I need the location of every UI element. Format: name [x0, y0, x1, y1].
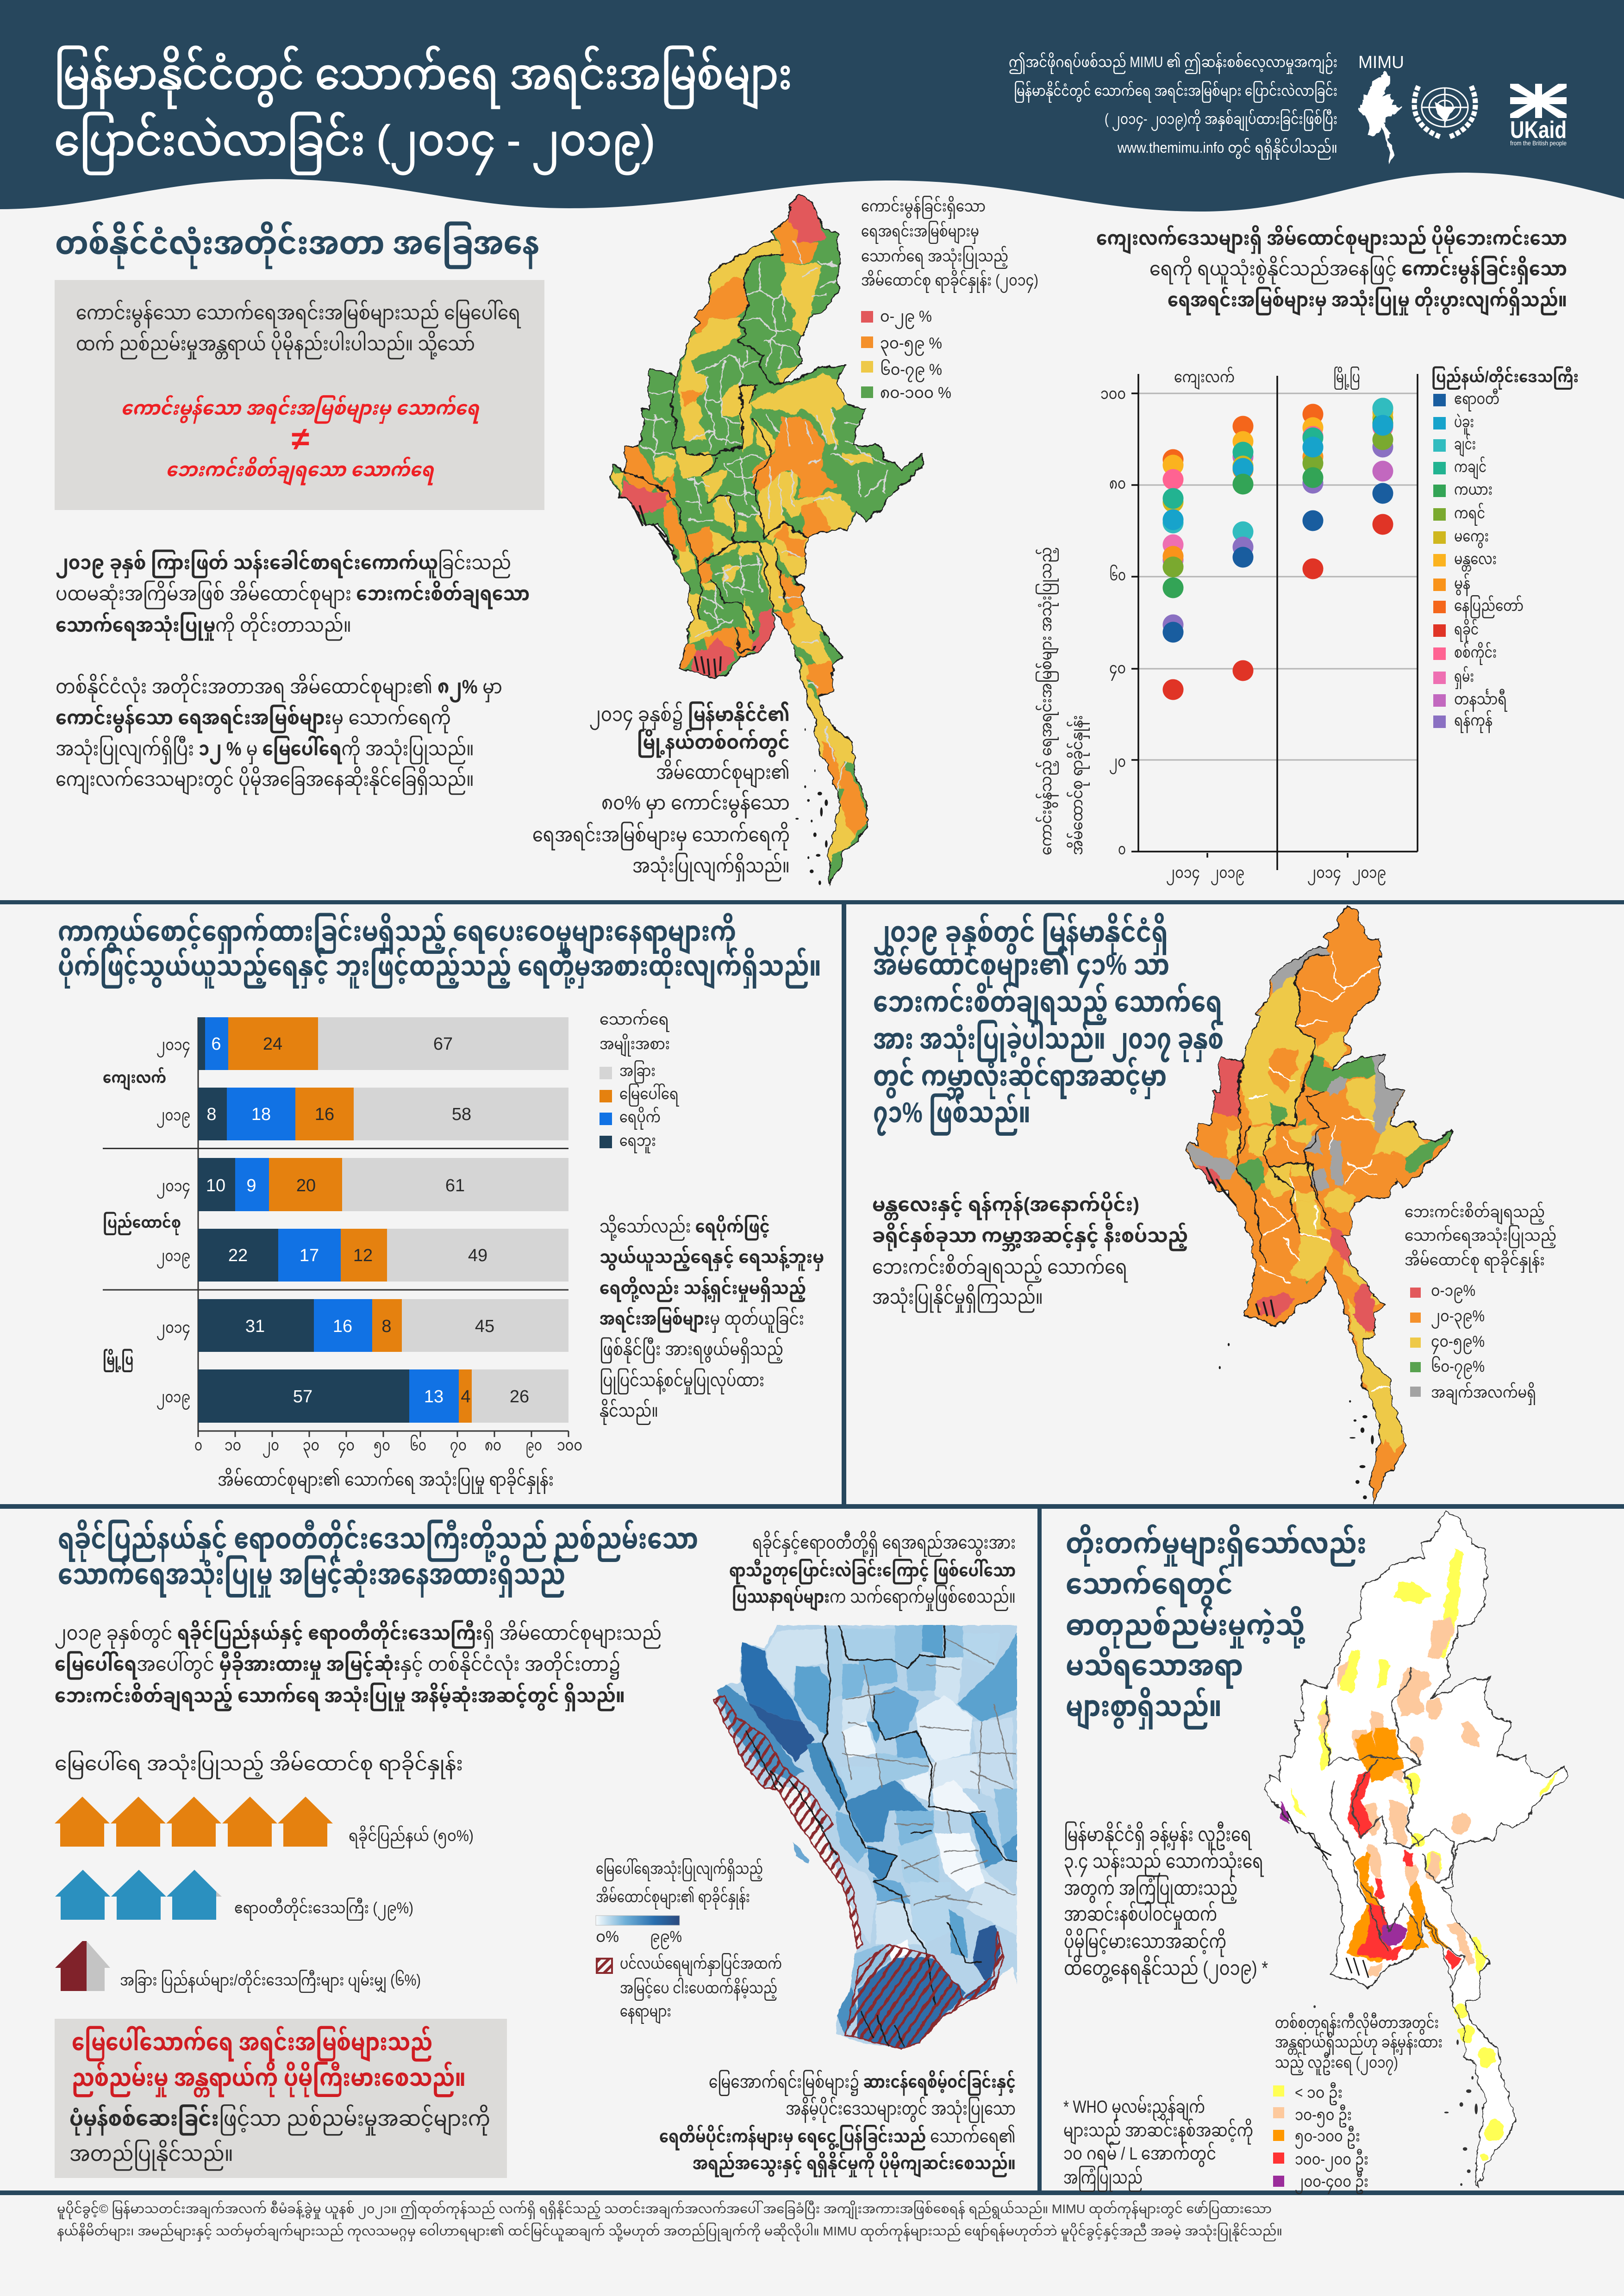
facet labels: ကျေးလက်: [1174, 366, 1235, 390]
text block: arsenic exposure: ၃.၄ သန်းသည် သောက်သုံးရေ: [1064, 1848, 1264, 1877]
legend: safely managed map: သောက်ရေအသုံးပြုသည့်: [1405, 1224, 1556, 1248]
panel: national overview: [55, 194, 1038, 885]
text block: arsenic exposure: [1064, 1822, 1268, 1984]
dots: rural 2014: [1163, 449, 1183, 700]
icon: UN emblem: [1414, 86, 1475, 137]
text block: climate: ပြဿနာရပ်များက သက်ရောက်မှုဖြစ်စေသည်။: [732, 1585, 1016, 1611]
label: Ayeyarwady share: ဧရာဝတီတိုင်းဒေသကြီး (၂၉%): [234, 1897, 413, 1921]
panel: rural urban scatter: [1035, 225, 1579, 885]
legend: map 2014: ရေအရင်းအမြစ်များမှ: [861, 220, 979, 244]
icon: UK aid logo: UKaid: [1510, 117, 1567, 143]
legend: water type: အခြား: [619, 1060, 656, 1083]
legend: safely managed map: ၀-၁၉%: [1431, 1282, 1475, 1303]
text block: salinity: မြေအောက်ရင်းမြစ်များ၌ ဆားငန်ရေစိမ့်ဝင်ခြင်းနှင့်: [709, 2070, 1016, 2096]
text block: piped and bottled: [600, 1214, 824, 1425]
bar: rural 2019: 8: [206, 1105, 217, 1124]
year labels: ၂၀၁၉: [156, 1388, 190, 1410]
x axis labels: [194, 1434, 582, 1458]
icon: UK aid logo: from the British people: [1510, 139, 1567, 147]
x axis labels: ၆၀: [410, 1434, 426, 1454]
text block: Mandalay and Yangon: [872, 1192, 1188, 1313]
x axis labels: ၂၀၁၉: [1211, 864, 1244, 885]
heading: safely managed: အိမ်ထောင်စုများ၏ ၄၁% သာ: [873, 945, 1169, 989]
legend: safely managed map: ၆၀-၇၉%: [1431, 1356, 1485, 1379]
header note: မြန်မာနိုင်ငံတွင် သောက်ရေ အရင်းအမြစ်များ ပြောင်းလဲလာခြင်း: [1014, 80, 1337, 103]
y axis labels: ၁၀၀: [1100, 385, 1126, 403]
legend: surface water map: ၀%: [596, 1928, 619, 1946]
footer disclaimer: နယ်နိမိတ်များ၊ အမည်များနှင့် သတ်မှတ်ချက်များသည် ကုလသမဂ္ဂမှ ဝေါဟာရများ၏ ထင်မြင်ယူဆချက် သို့မဟုတ် အတည်ပြုချက်ကို မဆိုလိုပါ။ MIMU ထုတ်ကုန်များသည် ဖျော်ရန်မဟုတ်ဘဲ မူပိုင်ခွင့်နှင့်အညီ အခမဲ့ အသုံးပြုနိုင်သည်။: [57, 2222, 1282, 2242]
legend: surface water map: ပင်လယ်ရေမျက်နှာပြင်အထက်: [620, 1952, 782, 1977]
bar: urban 2019: [198, 1369, 568, 1423]
text block: rural safer water: ရေအရင်းအမြစ်များမှ အသုံးပြုမှု တိုးပွားလျက်ရှိသည်။: [1168, 287, 1567, 316]
text block: urban 2014: ၈၀% မှာ ကောင်းမွန်သော: [601, 790, 790, 819]
text block: Mandalay and Yangon: မန္တလေးနှင့် ရန်ကုန်(အနောက်ပိုင်း): [872, 1192, 1139, 1220]
text block: rural safer water: ရေကို ရယူသုံးစွဲနိုင်သည်အနေဖြင့် ကောင်းမွန်ခြင်းရှိသော: [1149, 256, 1567, 285]
callout: improved is not safe: ≠: [291, 421, 309, 457]
legend: map 2014: ၀-၂၉ %: [880, 308, 932, 329]
legend: states and regions: မန္တလေး: [1454, 550, 1497, 572]
legend: states and regions: ပဲခူး: [1454, 413, 1474, 435]
map: improved water sources 2014: [610, 194, 924, 885]
legend: arsenic map: < ၁၀ ဦး: [1295, 2082, 1343, 2105]
map: surface water use: [713, 1625, 1017, 2049]
legend: surface water map: ၉၉%: [650, 1928, 682, 1949]
heading: safely managed: ၇၁% ဖြစ်သည်။: [873, 1093, 1031, 1136]
legend: surface water map: နေရာများ: [620, 2003, 671, 2024]
legend: water type: ရေပိုက်: [619, 1106, 661, 1130]
category labels: မြို့ပြ: [103, 1349, 133, 1372]
bar: rural 2014: [198, 1017, 568, 1070]
bar: urban 2019: 26: [510, 1387, 529, 1406]
bar: rural 2019: 58: [452, 1105, 471, 1124]
text block: dependence on surface water: ၂၀၁၉ ခုနှစ်တွင် ရခိုင်ပြည်နယ်နှင့် ဧရာဝတီတိုင်းဒေသကြီးရှိ အိမ်ထောင်စုများသည်: [55, 1620, 662, 1649]
bar: union 2014: 61: [445, 1176, 465, 1195]
icon: UK aid logo: [1510, 84, 1567, 147]
bar: urban 2019: 4: [461, 1387, 471, 1406]
text block: salinity: အနိမ့်ပိုင်းဒေသများတွင် အသုံးပြုသော: [786, 2097, 1016, 2123]
text block: urban 2014: အသုံးပြုလျက်ရှိသည်။: [632, 853, 790, 882]
x axis labels: ၂၀: [262, 1437, 279, 1458]
x axis labels: ၂၀၁၉: [1352, 864, 1386, 885]
text block: salinity: အရည်အသွေးနှင့် ရရှိနိုင်မှုကို ပိုမိုကျဆင်းစေသည်။: [693, 2151, 1016, 2178]
legend: safely managed map: [1405, 1201, 1556, 1406]
heading: Rakhine and Ayeyarwady: ရခိုင်ပြည်နယ်နှင့် ဧရာဝတီတိုင်းဒေသကြီးတို့သည် ညစ်ညမ်းသော: [58, 1519, 698, 1562]
legend: states and regions: စစ်ကိုင်း: [1454, 641, 1497, 665]
legend: states and regions: မကွေး: [1454, 528, 1489, 548]
legend: safely managed map: ဘေးကင်းစိတ်ချရသည့်: [1405, 1201, 1545, 1225]
legend: arsenic map: ၁၀၀-၂၀၀ ဦး: [1295, 2148, 1368, 2172]
legend: map 2014: ကောင်းမွန်ခြင်းရှိသော: [861, 195, 986, 219]
category labels: ပြည်ထောင်စု: [103, 1212, 181, 1235]
section dividers: [0, 900, 1624, 2195]
label: Rakhine share: ရခိုင်ပြည်နယ် (၅၀%): [349, 1824, 474, 1848]
x axis labels: ၂၀၁၄: [1307, 864, 1341, 885]
y axis labels: ၂၀: [1109, 753, 1126, 774]
pictogram heading: မြေပေါ်ရေ အသုံးပြုသည့် အိမ်ထောင်စု ရာခိုင်နှုန်း: [55, 1751, 463, 1780]
heading: chemical contamination: သောက်ရေတွင်: [1066, 1564, 1233, 1607]
panel: surface water Rakhine Ayeyarwady: [55, 1519, 1017, 2178]
callout: surface water risk: ပုံမှန်စစ်ဆေးခြင်းဖြင့်သာ ညစ်ညမ်းမှုအဆင့်များကို: [69, 2103, 490, 2136]
year labels: ၂၀၁၉: [156, 1247, 190, 1269]
header note: [1009, 51, 1337, 160]
bar: rural 2014: 6: [211, 1034, 221, 1054]
text block: arsenic exposure: ပိုမိုမြင့်မားသောအဆင့်ကို: [1064, 1929, 1226, 1957]
x axis labels: ၈၀: [485, 1437, 501, 1454]
axes: [103, 1017, 568, 1437]
legend: states and regions: တနင်္သာရီ: [1454, 688, 1507, 712]
callout: surface water risk: [55, 2019, 507, 2178]
category labels: ကျေးလက်: [103, 1067, 166, 1091]
text block: urban 2014: မြို့နယ်တစ်ဝက်တွင်: [637, 729, 790, 758]
legend: states and regions: ရှမ်း: [1454, 665, 1474, 689]
legend: arsenic map: သည့် လူဦးရေ (၂၀၁၇): [1275, 2051, 1398, 2075]
text block: 2019 census: [56, 550, 530, 641]
legend: map 2014: သောက်ရေ အသုံးပြုသည့်: [861, 245, 1008, 269]
bar: union 2019: 17: [300, 1246, 319, 1265]
heading: Rakhine and Ayeyarwady: [58, 1519, 698, 1598]
legend: arsenic map: ၅၀-၁၀၀ ဦး: [1295, 2125, 1360, 2149]
text block: arsenic exposure: အတွက် အကြံပြုထားသည့်: [1064, 1875, 1237, 1904]
label: other regions share: အခြား ပြည်နယ်များ/တိုင်းဒေသကြီးများ ပျမ်းမျှ (၆%): [120, 1969, 421, 1993]
bar: rural 2019: 16: [315, 1105, 334, 1124]
text block: piped and bottled: ဖြစ်နိုင်ပြီး အားရဖွယ်မရှိသည့်: [600, 1337, 783, 1363]
callout: surface water risk: အတည်ပြုနိုင်သည်။: [69, 2139, 233, 2171]
footnote: WHO guideline: [1063, 2095, 1253, 2192]
text block: urban 2014: အိမ်ထောင်စုများ၏: [656, 759, 790, 788]
x axis labels: ၄၀: [338, 1437, 355, 1458]
heading: safely managed: အား အသုံးပြုခဲ့ပါသည်။ ၂၀၁၇ ခုနှစ်: [873, 1019, 1224, 1063]
legend: states and regions: [1431, 366, 1579, 733]
x axis labels: ၁၀: [225, 1437, 241, 1454]
legend: states and regions: ပြည်နယ်/တိုင်းဒေသကြီး: [1431, 366, 1579, 390]
text block: climate: ရာသီဥတုပြောင်းလဲခြင်းကြောင့် ဖြစ်ပေါ်သော: [729, 1558, 1016, 1585]
bar: union 2019: 22: [228, 1246, 248, 1265]
bar: urban 2014: 31: [245, 1317, 265, 1336]
dots: urban 2019: [1372, 398, 1393, 535]
legend: water type: အမျိုးအစား: [600, 1033, 670, 1057]
bar chart: [103, 1017, 582, 1494]
legend: surface water map: [596, 1857, 782, 2024]
text block: dependence on surface water: ဘေးကင်းစိတ်ချရသည့် သောက်ရေ အသုံးပြုမှု အနိမ့်ဆုံးအဆင့်တွင် ရှိသည်။: [55, 1683, 625, 1711]
text block: climate: [729, 1531, 1016, 1611]
legend: safely managed map: အချက်အလက်မရှိ: [1431, 1381, 1536, 1406]
icons: Rakhine houses: [55, 1797, 333, 1847]
callout: improved is not safe: ကောင်းမွန်သော အရင်းအမြစ်များမှ သောက်ရေ: [121, 395, 480, 424]
callout: improved is not safe: ကောင်းမွန်သော သောက်ရေအရင်းအမြစ်များသည် မြေပေါ်ရေ: [76, 300, 521, 329]
y axis labels: [1100, 385, 1126, 858]
x axis title: အိမ်ထောင်စုများ၏ သောက်ရေ အသုံးပြုမှု ရာခိုင်နှုန်း: [218, 1468, 554, 1494]
text block: rural safer water: [1096, 225, 1567, 316]
map: safely managed water 2019: [1187, 906, 1452, 1503]
text block: salinity: [659, 2070, 1016, 2178]
bar: union 2014: 9: [246, 1176, 256, 1195]
bar: urban 2014: 8: [381, 1317, 392, 1336]
heading: safely managed: [873, 912, 1224, 1136]
footnote: WHO guideline: များသည် အာဆင်းနစ်အဆင့်ကို: [1063, 2118, 1253, 2145]
x axis labels: ၂၀၁၄: [1166, 864, 1200, 885]
legend: safely managed map: အိမ်ထောင်စု ရာခိုင်နှုန်း: [1405, 1249, 1545, 1273]
heading: safely managed: ၂၀၁၉ ခုနှစ်တွင် မြန်မာနိုင်ငံရှိ: [873, 912, 1168, 956]
text block: 2019 census: သောက်ရေအသုံးပြုမှုကို တိုင်းတာသည်။: [56, 612, 351, 641]
year labels: ၂၀၁၄: [156, 1319, 190, 1340]
text block: Mandalay and Yangon: ဘေးကင်းစိတ်ချရသည့် သောက်ရေ: [872, 1254, 1128, 1283]
heading: chemical contamination: မသိရသောအရာ: [1066, 1646, 1243, 1689]
year labels: [156, 1036, 190, 1410]
legend: states and regions: ဧရာဝတီ: [1454, 388, 1499, 411]
legend: arsenic map: တစ်စတုရန်းကီလိုမီတာအတွင်း: [1275, 2011, 1439, 2035]
map: arsenic risk: [1266, 1511, 1567, 2187]
legend: states and regions: ရခိုင်: [1454, 618, 1479, 642]
bar: rural 2019: 18: [251, 1105, 271, 1124]
footnote: WHO guideline: အကြံပြုသည်: [1063, 2165, 1143, 2192]
dots: urban 2014: [1303, 404, 1323, 579]
bar: rural 2014: 24: [263, 1034, 282, 1054]
footer disclaimer: [57, 2200, 1282, 2242]
heading: Rakhine and Ayeyarwady: သောက်ရေအသုံးပြုမှု အမြင့်ဆုံးအနေအထားရှိသည်: [58, 1555, 565, 1598]
y axis labels: ၀: [1118, 840, 1126, 858]
facet labels: မြို့ပြ: [1333, 366, 1360, 390]
footer disclaimer: မူပိုင်ခွင့်© မြန်မာသတင်းအချက်အလက် စီမံခန့်ခွဲမှု ယူနစ် ၂၀၂၁။ ဤထုတ်ကုန်သည် လက်ရှိ ရရှိနိုင်သည့် သတင်းအချက်အလက်အပေါ် အခြေခံပြီး အကျိုးအကားအဖြစ်စေရန် ရည်ရွယ်သည်။ MIMU ထုတ်ကုန်များတွင် ဖော်ပြထားသော: [57, 2200, 1272, 2219]
bar: union 2019: 12: [353, 1246, 373, 1265]
header note: ဤအင်ဖိုဂရပ်ဖစ်သည် MIMU ၏ ဤဆန်းစစ်လေ့လာမှုအကျဉ်း: [1009, 51, 1337, 74]
legend: states and regions: ကချင်: [1454, 455, 1487, 480]
heading: chemical contamination: များစွာရှိသည်။: [1066, 1686, 1222, 1730]
title: ပြောင်းလဲလာခြင်း (၂၀၁၄ - ၂၀၁၉): [54, 112, 655, 175]
text block: piped and bottled: သွယ်ယူသည့်ရေနှင့် ရေသန့်ဘူးမှ: [600, 1245, 824, 1271]
heading: safely managed: တွင် ကမ္ဘာလုံးဆိုင်ရာအဆင့်မှာ: [873, 1056, 1167, 1100]
callout: surface water risk: မြေပေါ်သောက်ရေ အရင်းအမြစ်များသည်: [72, 2026, 432, 2062]
text block: national figures: တစ်နိုင်ငံလုံး အတိုင်းအတာအရ အိမ်ထောင်စုများ၏ ၈၂% မှာ: [56, 674, 502, 703]
text block: piped and bottled: နိုင်သည်။: [600, 1399, 658, 1425]
legend: surface water map: အိမ်ထောင်စုများ၏ ရာခိုင်နှုန်း: [596, 1885, 750, 1910]
text block: Mandalay and Yangon: အသုံးပြုနိုင်မှုရှိကြသည်။: [872, 1284, 1043, 1313]
text block: 2019 census: ပထမဆုံးအကြိမ်အဖြစ် အိမ်ထောင်စုများ ဘေးကင်းစိတ်ချရသော: [56, 581, 530, 610]
legend: water type: သောက်ရေ: [600, 1008, 669, 1032]
bar: urban 2019: 13: [424, 1387, 443, 1406]
legend: map 2014: [861, 195, 1038, 402]
legend: map 2014: ၃၀-၅၉ %: [880, 335, 942, 356]
legend: arsenic map: ၂၀၀-၄၀၀ ဦး: [1295, 2171, 1368, 2194]
heading: unprotected sources: [58, 913, 821, 989]
text block: 2019 census: ၂၀၁၉ ခုနှစ် ကြားဖြတ် သန်းခေါင်စာရင်းကောက်ယူခြင်းသည်: [56, 550, 511, 579]
y axis labels: ၄၀: [1109, 660, 1126, 681]
x axis labels: ၅၀: [374, 1437, 390, 1458]
bar: union 2014: 20: [296, 1176, 316, 1195]
panel: safely managed water: [872, 906, 1556, 1503]
legend: arsenic map: အန္တရာယ်ရှိသည်ဟု ခန့်မှန်းထား: [1275, 2031, 1443, 2055]
legend: surface water map: အမြင့်ပေ ငါးပေထက်နိမ့်သည့်: [620, 1977, 777, 2001]
header note: www.themimu.info တွင် ရရှိနိုင်ပါသည်။: [1117, 137, 1337, 160]
text block: urban 2014: ၂၀၁၄ ခုနှစ်၌ မြန်မာနိုင်ငံ၏: [589, 702, 790, 730]
y axis labels: ၆၀: [1109, 564, 1126, 584]
x axis labels: ၇၀: [450, 1437, 467, 1458]
text block: national figures: [56, 674, 502, 795]
legend: arsenic map: ၁၀-၅၀ ဦး: [1295, 2104, 1352, 2128]
year labels: ၂၀၁၄: [156, 1036, 190, 1058]
legend: map 2014: ၆၀-၇၉ %: [880, 359, 942, 382]
panel: water sources stacked bars: [58, 913, 824, 1494]
callout: improved is not safe: ထက် ညစ်ညမ်းမှုအန္တရာယ် ပိုမိုနည်းပါးပါသည်။ သို့သော်: [76, 331, 475, 360]
x axis labels: ၀: [194, 1437, 202, 1454]
callout: improved is not safe: ဘေးကင်းစိတ်ချရသော သောက်ရေ: [166, 456, 434, 485]
y axis title: [1035, 547, 1090, 855]
legend: safely managed map: ၂၀-၃၉%: [1431, 1307, 1485, 1329]
text block: urban 2014: ရေအရင်းအမြစ်များမှ သောက်ရေကို: [532, 822, 790, 851]
y axis title: ကောင်းမွန်သည့် ရေအရင်းအမြစ်များ အသုံးပြုသည့်: [1035, 547, 1059, 855]
text block: national figures: ကောင်းမွန်သော ရေအရင်းအမြစ်များမှ သောက်ရေကို: [56, 705, 451, 734]
footnote: WHO guideline: * WHO မှလမ်းညွှန်ချက်: [1063, 2095, 1205, 2121]
bar: union 2019: [198, 1229, 568, 1282]
legend: water type: [600, 1008, 679, 1153]
footnote: WHO guideline: ၁၀ ဂရမ် / L အောက်တွင်: [1063, 2141, 1216, 2168]
bar: rural 2014: 67: [433, 1034, 453, 1054]
text block: Mandalay and Yangon: ခရိုင်နှစ်ခုသာ ကမ္ဘာ့အဆင့်နှင့် နီးစပ်သည့်: [872, 1223, 1188, 1251]
heading: unprotected sources: ကာကွယ်စောင့်ရှောက်ထားခြင်းမရှိသည့် ရေပေးဝေမှုများနေရာများကို: [58, 913, 736, 954]
x axis labels: ၃၀: [303, 1437, 319, 1458]
legend: water type: မြေပေါ်ရေ: [619, 1083, 679, 1107]
chart: dot plot: [1035, 366, 1579, 885]
bar: rural 2019: [198, 1088, 568, 1140]
y axis title: အိမ်ထောင်စု ရာခိုင်နှုန်း: [1066, 715, 1090, 855]
legend: states and regions: ကယား: [1454, 481, 1493, 498]
bar: urban 2019: 57: [293, 1387, 312, 1406]
legend: water type: ရေဘူး: [619, 1132, 656, 1153]
text block: rural safer water: ကျေးလက်ဒေသများရှိ အိမ်ထောင်စုများသည် ပိုမိုဘေးကင်းသော: [1096, 225, 1567, 254]
legend: states and regions: မွန်: [1454, 572, 1470, 596]
icons: Ayeyarwady houses: [55, 1870, 222, 1920]
header band: [0, 0, 1624, 212]
year labels: ၂၀၁၄: [156, 1177, 190, 1199]
legend: safely managed map: ၄၀-၅၉%: [1431, 1333, 1485, 1354]
legend: arsenic map: [1273, 2011, 1443, 2194]
MIMU logo: [1358, 53, 1404, 164]
bar: urban 2014: 16: [333, 1317, 352, 1336]
legend: states and regions: ကရင်: [1454, 502, 1485, 526]
facet labels: [1174, 366, 1360, 390]
text block: piped and bottled: အရင်းအမြစ်များမှ ထုတ်ယူခြင်း: [600, 1307, 804, 1333]
heading: unprotected sources: ပိုက်ဖြင့်သွယ်ယူသည့်ရေနှင့် ဘူးဖြင့်ထည့်သည့် ရေတို့မှအစားထိုးလျက်ရှိသည်။: [58, 948, 821, 989]
legend: states and regions: နေပြည်တော်: [1454, 594, 1524, 618]
text block: national figures: ကျေးလက်ဒေသများတွင် ပိုမိုအခြေအနေဆိုးနိုင်ခြေရှိသည်။: [56, 766, 474, 795]
header note: ( ၂၀၁၄- ၂၀၁၉)ကို အနှစ်ချုပ်ထားခြင်းဖြစ်ပြီး: [1105, 108, 1337, 131]
heading: chemical contamination: တိုးတက်မှုများရှိသော်လည်း: [1066, 1524, 1367, 1568]
category labels: [103, 1067, 181, 1372]
year labels: ၂၀၁၉: [156, 1107, 190, 1128]
legend: surface water map: မြေပေါ်ရေအသုံးပြုလျက်ရှိသည့်: [596, 1857, 763, 1882]
x axis labels: [1166, 864, 1386, 885]
x axis labels: ၉၀: [525, 1437, 542, 1458]
text block: national figures: အသုံးပြုလျက်ရှိပြီး ၁၂ % မှ မြေပေါ်ရေကို အသုံးပြုသည်။: [56, 736, 474, 765]
text block: dependence on surface water: မြေပေါ်ရေအပေါ်တွင် မှီခိုအားထားမှု အမြင့်ဆုံးနှင့် တစ်နိုင်ငံလုံး အတိုင်းတာ၌: [55, 1651, 620, 1680]
text block: dependence on surface water: [55, 1620, 662, 1711]
legend: map 2014: အိမ်ထောင်စု ရာခိုင်နှုန်း (၂၀၁၄): [861, 269, 1038, 293]
title: မြန်မာနိုင်ငံတွင် သောက်ရေ အရင်းအမြစ်များ: [54, 46, 792, 109]
heading: chemical contamination: ဓာတုညစ်ညမ်းမှုကဲ့သို့: [1066, 1605, 1305, 1649]
legend: states and regions: ချင်း: [1454, 433, 1476, 457]
bar: union 2014: 10: [206, 1176, 225, 1195]
dots: rural 2019: [1232, 416, 1254, 681]
heading: safely managed: ဘေးကင်းစိတ်ချရသည့် သောက်ရေ: [873, 982, 1223, 1026]
text block: piped and bottled: ရေတို့လည်း သန့်ရှင်းမှုမရှိသည့်: [600, 1276, 806, 1302]
bar: urban 2014: [198, 1299, 568, 1352]
text block: urban 2014: [532, 702, 790, 882]
text block: piped and bottled: သို့သော်လည်း ရေပိုက်ဖြင့်: [600, 1214, 770, 1241]
x axis labels: ၁၀၀: [557, 1437, 582, 1454]
legend: states and regions: ရန်ကုန်: [1454, 709, 1493, 733]
text block: arsenic exposure: မြန်မာနိုင်ငံရှိ ခန့်မှန်း လူဦးရေ: [1064, 1822, 1252, 1850]
text block: salinity: ရေတိမ်ပိုင်းကန်များမှ ရေငွေ့ပြန်ခြင်းသည် သောက်ရေ၏: [659, 2124, 1016, 2151]
icon: other regions house: [55, 1941, 110, 1991]
bar: union 2014: [198, 1158, 568, 1211]
legend: map 2014: ၈၀-၁၀၀ %: [880, 384, 951, 402]
panel: arsenic: [1063, 1511, 1567, 2194]
text block: climate: ရခိုင်နှင့်ဧရာဝတီတို့ရှိ ရေအရည်အသွေးအား: [752, 1531, 1016, 1557]
callout: surface water risk: ညစ်ညမ်းမှု အန္တရာယ်ကို ပိုမိုကြီးမားစေသည်။: [72, 2061, 466, 2097]
MIMU logo: MIMU: [1358, 53, 1404, 72]
text block: arsenic exposure: အာဆင်းနစ်ပါဝင်မှုထက်: [1064, 1901, 1217, 1930]
heading: chemical contamination: [1066, 1524, 1367, 1730]
title: [54, 46, 792, 175]
text block: piped and bottled: ပြုပြင်သန့်စင်မှုပြုလုပ်ထား: [600, 1368, 764, 1394]
bar: urban 2014: 45: [475, 1317, 494, 1336]
text block: arsenic exposure: ထိတွေ့နေရနိုင်သည် (၂၀၁၉) *: [1064, 1955, 1268, 1984]
y axis labels: ၈၀: [1109, 475, 1126, 492]
bar: union 2019: 49: [468, 1246, 487, 1265]
callout: improved is not safe: [55, 280, 544, 510]
heading: national overview: တစ်နိုင်ငံလုံးအတိုင်းအတာ အခြေအနေ: [55, 221, 539, 269]
